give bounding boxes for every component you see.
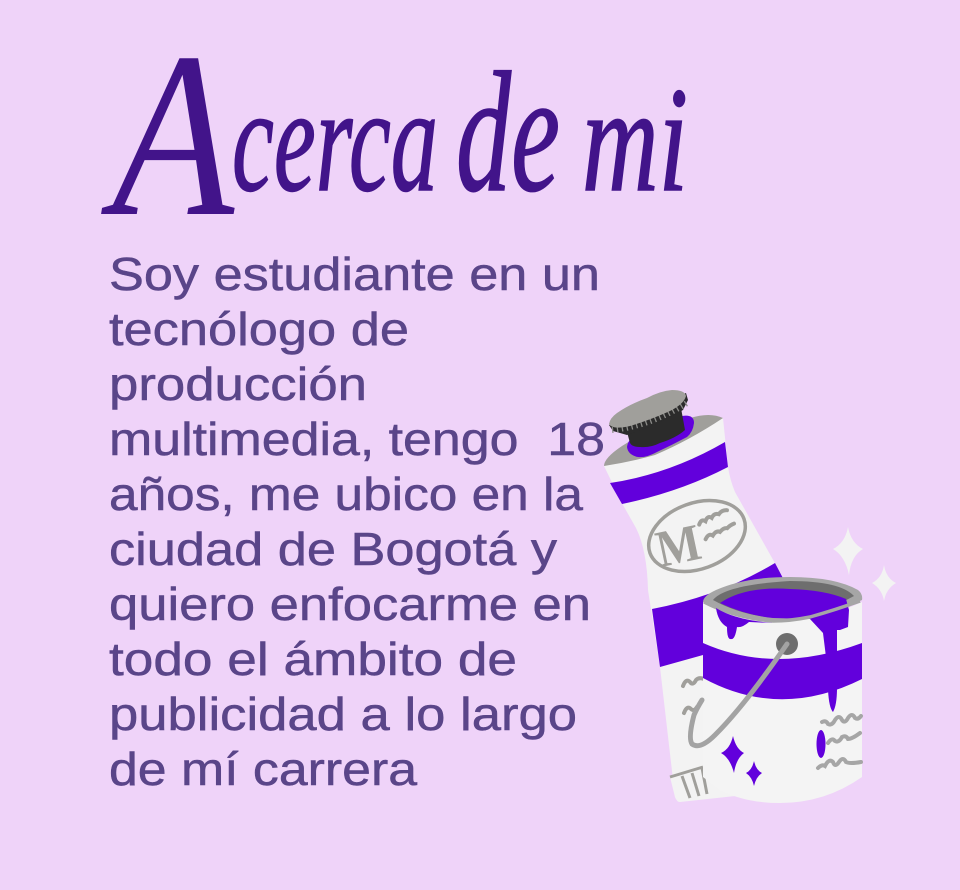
body text block: tecnólogo de: [109, 303, 409, 355]
tube neck: [627, 408, 685, 447]
body text block: Soy estudiante en un: [109, 248, 600, 300]
tube logo oval: M: [651, 514, 706, 579]
tube paint at neck: [627, 416, 694, 457]
tube upper purple band: [610, 442, 728, 504]
title: mi: [582, 57, 688, 223]
bucket handle: [690, 644, 787, 746]
bucket scribbles: [818, 715, 861, 768]
bucket rim: [703, 577, 862, 622]
tube bottom crimp: [670, 767, 722, 802]
bucket handle knob: [776, 633, 798, 655]
bucket paint: [720, 589, 849, 657]
tube cap: [609, 390, 688, 435]
icon: purple sparkles: [721, 736, 762, 786]
icon: white sparkles: [833, 527, 896, 601]
purple paint drop: [816, 730, 826, 758]
body text block: ciudad de Bogotá y: [109, 523, 557, 575]
title: [101, 5, 688, 266]
body text block: años, me ubico en la: [109, 468, 583, 520]
icon: paint bucket: [690, 577, 862, 803]
bucket inner shadow: [713, 581, 854, 618]
body text block: producción: [109, 358, 367, 410]
title: A: [101, 5, 235, 266]
bucket purple band: [703, 643, 862, 699]
body text block: [109, 248, 605, 795]
tube body: [604, 418, 790, 802]
body text block: publicidad a lo largo: [109, 688, 577, 740]
left drip: [716, 608, 773, 639]
tube lower purple band: [652, 563, 790, 667]
body text block: todo el ámbito de: [109, 633, 517, 685]
title: de: [456, 38, 560, 228]
icon: paint tube: [604, 390, 790, 802]
illustration: paint tube and bucket: [604, 390, 896, 803]
rim front lip: [704, 601, 860, 621]
tube logo oval: [639, 488, 756, 586]
tube scribbles: [683, 678, 704, 713]
bucket body: [703, 602, 862, 803]
tube shoulder: [604, 415, 723, 466]
body text block: multimedia, tengo 18: [109, 413, 605, 465]
title: cerca: [232, 57, 438, 223]
body text block: quiero enfocarme en: [109, 578, 591, 630]
long drip: [828, 688, 837, 712]
body text block: de mí carrera: [109, 743, 417, 795]
